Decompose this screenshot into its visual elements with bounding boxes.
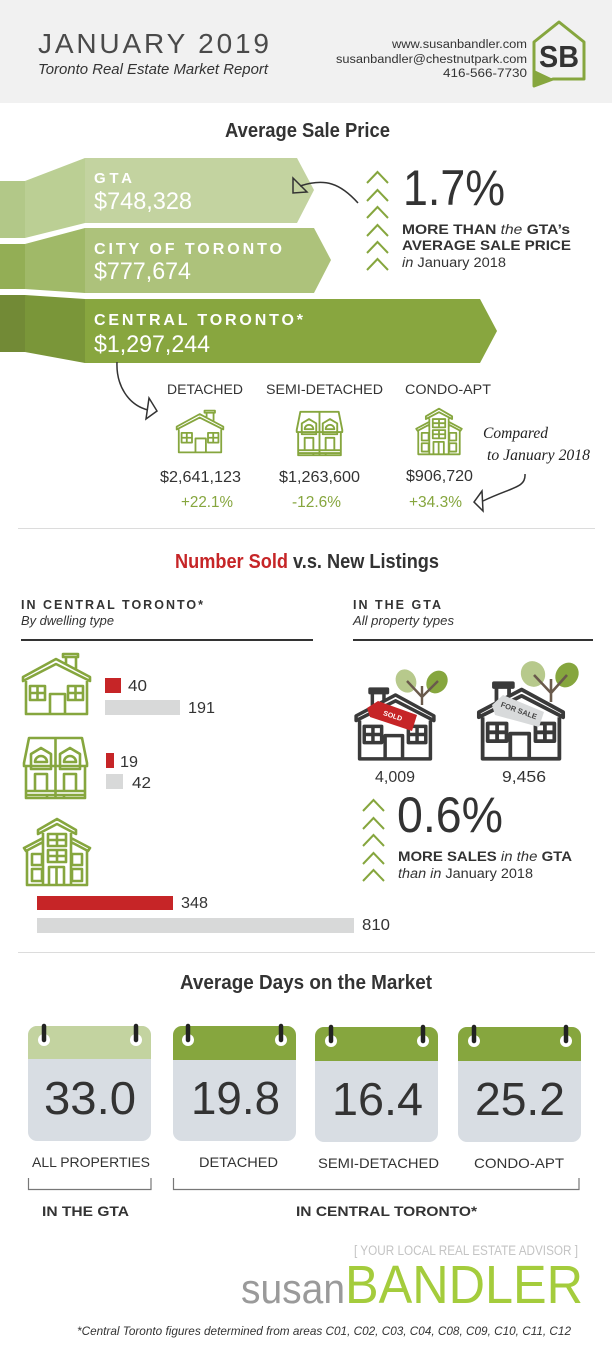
panel: semi-detached price: SEMI-DETACHED <box>266 382 383 397</box>
callout: price change: 1.7% <box>403 160 505 216</box>
callout: sales change: 0.6% <box>397 787 503 843</box>
handwritten note: Compared <box>483 425 549 442</box>
for sale count: 9,456 <box>502 769 546 786</box>
heading: average sale price: Average Sale Price <box>225 120 390 142</box>
panel: condo price: $906,720 <box>406 468 473 485</box>
panel: condo price: +34.3% <box>409 494 462 511</box>
subheading: GTA: IN THE GTA <box>353 598 441 612</box>
subheading: central toronto: IN CENTRAL TORONTO* <box>21 598 203 612</box>
panel: GTA ribbon: $748,328 <box>94 188 192 215</box>
panel: City of Toronto ribbon: $777,674 <box>94 258 191 285</box>
icon: detached house <box>23 654 90 714</box>
icon: detached house <box>177 411 223 452</box>
subtitle: Toronto Real Estate Market Report <box>38 61 269 78</box>
subheading: GTA: All property types <box>352 614 454 628</box>
panel: detached price: $2,641,123 <box>160 469 241 486</box>
panel: calendar detached: DETACHED <box>199 1154 278 1170</box>
bracket: in central toronto <box>174 1178 579 1219</box>
subheading: GTA <box>352 598 593 641</box>
subheading: central toronto <box>21 598 313 641</box>
panel: calendar detached: 19.8 <box>191 1072 280 1124</box>
panel: semi-detached sold and listed: 19 <box>120 754 138 771</box>
panel: Central Toronto ribbon: $1,297,244 <box>94 331 210 358</box>
panel: calendar semi-detached: SEMI-DETACHED <box>318 1155 439 1171</box>
contact details <box>336 39 527 80</box>
panel: condo sold and listed <box>24 819 390 934</box>
panel: detached sold and listed: 40 <box>128 678 147 695</box>
arrow: note to condo change <box>474 474 525 511</box>
icon: semi-detached house <box>24 738 87 798</box>
panel: detached price <box>160 382 243 511</box>
icon: up chevrons price <box>367 172 388 270</box>
panel: condo price <box>405 382 491 511</box>
heading: number sold vs new listings: Number Sold v.s. New Listings <box>175 551 439 573</box>
title: JANUARY 2019 <box>38 28 269 59</box>
handwritten note <box>483 425 590 464</box>
panel: calendar condo-apt: 25.2 <box>475 1073 565 1125</box>
callout: price change: AVERAGE SALE PRICE <box>402 237 571 253</box>
panel: Central Toronto ribbon: CENTRAL TORONTO* <box>94 312 304 329</box>
callout: price change <box>402 160 571 270</box>
icon: SB logo <box>534 22 584 86</box>
panel: semi-detached price: $1,263,600 <box>279 469 360 486</box>
icon: condo building <box>24 819 90 885</box>
callout: price change: MORE THAN the GTA’s <box>402 221 570 237</box>
bracket: in central toronto: IN CENTRAL TORONTO* <box>296 1204 478 1219</box>
bracket: in the GTA <box>28 1178 151 1219</box>
panel: detached sold and listed: 191 <box>188 700 215 717</box>
icon: sold house with plant <box>356 666 452 759</box>
logo: Susan Bandler: susan <box>241 1265 345 1312</box>
callout: price change: in January 2018 <box>402 255 506 270</box>
panel: detached price: +22.1% <box>181 494 233 511</box>
header band <box>0 0 612 103</box>
panel: condo sold and listed: 810 <box>362 917 390 934</box>
logo: Susan Bandler: [ YOUR LOCAL REAL ESTATE ADVISOR ] <box>354 1243 578 1258</box>
panel: GTA ribbon: GTA <box>94 170 132 187</box>
panel: calendar all properties <box>28 1026 151 1170</box>
icon: SB logo: SB <box>539 39 579 74</box>
arrow: to GTA ribbon <box>293 178 358 203</box>
contact details: susanbandler@chestnutpark.com <box>336 54 527 66</box>
callout: sales change: MORE SALES in the GTA <box>398 849 572 864</box>
panel: semi-detached price: -12.6% <box>292 494 341 511</box>
contact details: www.susanbandler.com <box>391 39 527 51</box>
icon: for sale house with plant <box>479 657 583 759</box>
handwritten note: to January 2018 <box>487 447 590 464</box>
arrow: to dwelling prices <box>117 362 157 419</box>
logo: Susan Bandler: BANDLER <box>345 1255 583 1315</box>
callout: sales change <box>397 787 572 881</box>
panel: detached sold and listed <box>23 654 215 717</box>
panel: condo sold and listed: 348 <box>181 895 208 912</box>
panel: calendar condo-apt: CONDO-APT <box>474 1155 564 1171</box>
panel: semi-detached price <box>266 382 383 511</box>
heading: average days on the market: Average Days on the Market <box>180 972 432 994</box>
icon: condo building <box>416 409 462 454</box>
contact details: 416-566-7730 <box>443 68 527 80</box>
icon: semi-detached house <box>297 412 342 455</box>
panel: calendar detached <box>173 1026 296 1170</box>
subheading: central toronto: By dwelling type <box>21 614 114 628</box>
panel: calendar semi-detached <box>315 1027 439 1171</box>
panel: calendar semi-detached: 16.4 <box>332 1073 423 1125</box>
panel: detached price: DETACHED <box>167 382 243 397</box>
icon: up chevrons sales <box>363 800 384 881</box>
panel: calendar condo-apt <box>458 1027 581 1171</box>
logo: Susan Bandler <box>241 1243 583 1315</box>
bracket: in the GTA: IN THE GTA <box>42 1204 129 1219</box>
panel: semi-detached sold and listed <box>24 738 151 798</box>
panel: City of Toronto ribbon <box>0 228 331 293</box>
icon: for sale house with plant: FOR SALE <box>499 700 538 721</box>
panel: City of Toronto ribbon: CITY OF TORONTO <box>94 241 282 258</box>
panel: calendar all properties: ALL PROPERTIES <box>32 1154 150 1170</box>
callout: sales change: than in January 2018 <box>398 866 533 881</box>
panel: calendar all properties: 33.0 <box>44 1072 136 1124</box>
icon: sold house with plant: SOLD <box>382 710 403 723</box>
panel: condo price: CONDO-APT <box>405 382 491 397</box>
footnote: *Central Toronto figures determined from areas C01, C02, C03, C04, C08, C09, C10, C11, C12 <box>77 1324 571 1338</box>
panel: semi-detached sold and listed: 42 <box>132 775 151 792</box>
panel: Central Toronto ribbon <box>0 295 497 363</box>
sold count: 4,009 <box>375 769 415 786</box>
panel: GTA ribbon <box>0 158 314 238</box>
